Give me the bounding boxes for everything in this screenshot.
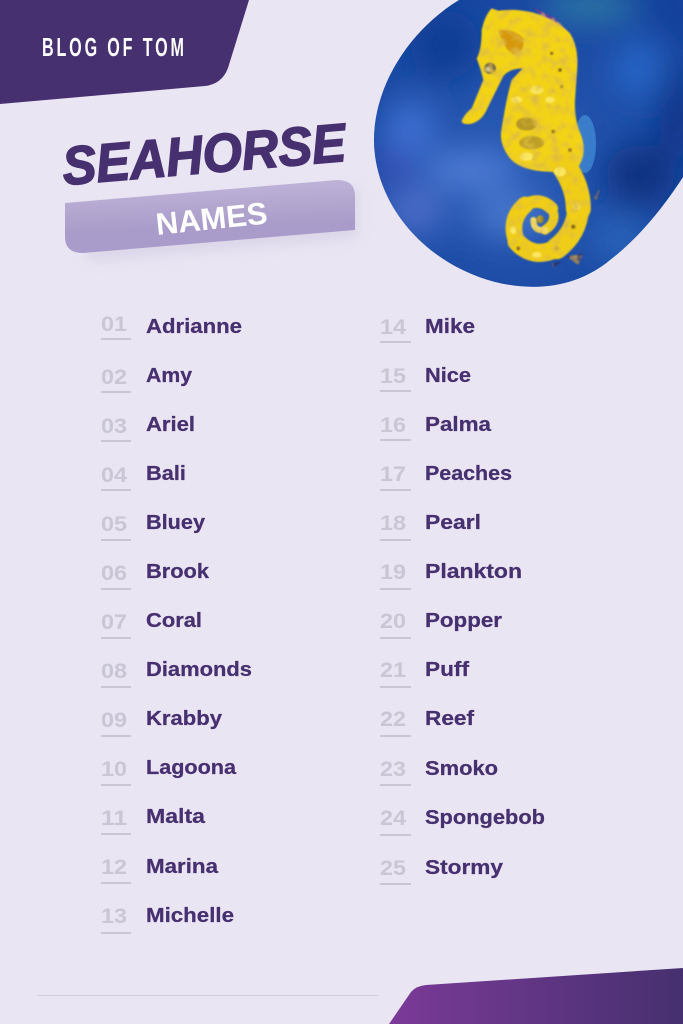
name 07	[101, 609, 202, 638]
name 19	[380, 560, 522, 589]
footer rule	[37, 994, 378, 996]
photo: yellow seahorse on blue water	[370, 0, 683, 295]
name 20	[380, 609, 502, 638]
name 25: 25	[380, 856, 406, 880]
name 18: 18	[380, 511, 406, 535]
name 13: 13	[101, 904, 127, 928]
subtitle banner	[65, 180, 358, 262]
name 12	[101, 855, 219, 883]
name 15	[380, 364, 471, 391]
name 25	[380, 856, 504, 884]
name 25: Stormy	[425, 856, 504, 879]
footer banner	[389, 968, 683, 1024]
name 08: Diamonds	[146, 658, 252, 681]
name 09: 09	[101, 708, 127, 732]
name 11: Malta	[146, 805, 206, 828]
name 11	[101, 805, 206, 834]
name 09	[101, 707, 223, 736]
name 13: Michelle	[146, 904, 234, 927]
right column list	[380, 315, 545, 884]
title: seahorse: SEAHORSE	[60, 113, 350, 197]
name 21: Puff	[425, 658, 469, 681]
left column list	[101, 312, 252, 933]
name 03: 03	[101, 414, 127, 438]
name 23: 23	[380, 757, 406, 781]
name 03: Ariel	[146, 413, 195, 436]
name 19: 19	[380, 560, 406, 584]
name 12: 12	[101, 855, 127, 879]
name 03	[101, 413, 195, 441]
name 01: 01	[101, 312, 127, 336]
name 19: Plankton	[425, 560, 522, 583]
name 16: Palma	[425, 413, 492, 436]
name 18	[380, 511, 481, 540]
name 01: Adrianne	[146, 315, 242, 338]
name 17	[380, 462, 512, 490]
brand name: BLOG OF TOM	[42, 32, 187, 62]
name 23: Smoko	[425, 757, 498, 780]
name 20: 20	[380, 609, 406, 633]
header banner	[0, 0, 249, 104]
name 06	[101, 560, 210, 589]
name 09: Krabby	[146, 707, 223, 730]
name 12: Marina	[146, 855, 219, 878]
name 07: Coral	[146, 609, 202, 632]
name 17: Peaches	[425, 462, 512, 485]
name 15: 15	[380, 364, 406, 388]
name 02	[101, 364, 193, 392]
name 22: Reef	[425, 707, 474, 730]
name 06: 06	[101, 561, 127, 585]
name 13	[101, 904, 234, 933]
name 11: 11	[101, 806, 127, 830]
name 22: 22	[380, 707, 406, 731]
name 23	[380, 757, 498, 785]
fin	[577, 115, 596, 173]
name 22	[380, 707, 474, 736]
name 16: 16	[380, 413, 406, 437]
name 04: 04	[101, 463, 127, 487]
name 06: Brook	[146, 560, 210, 583]
name 05: Bluey	[146, 511, 206, 534]
name 08	[101, 658, 252, 687]
name 16	[380, 413, 492, 440]
name 10: 10	[101, 757, 127, 781]
name 21: 21	[380, 658, 406, 682]
name 15: Nice	[425, 364, 471, 387]
name 05	[101, 511, 206, 540]
name 24: Spongebob	[425, 806, 545, 829]
name 20: Popper	[425, 609, 502, 632]
name 04: Bali	[146, 462, 186, 485]
name 24: 24	[380, 806, 406, 830]
name 05: 05	[101, 512, 127, 536]
name 04	[101, 462, 186, 490]
name 17: 17	[380, 462, 406, 486]
name 08: 08	[101, 659, 127, 683]
name 07: 07	[101, 610, 127, 634]
name 10: Lagoona	[146, 756, 237, 779]
name 18: Pearl	[425, 511, 481, 534]
name 02: 02	[101, 365, 127, 389]
subtitle text: NAMES	[154, 195, 269, 242]
seahorse	[462, 7, 601, 267]
name 14: Mike	[425, 315, 475, 338]
name 02: Amy	[146, 364, 193, 387]
name 21	[380, 658, 469, 687]
name 01	[101, 312, 242, 339]
name 10	[101, 756, 237, 785]
name 14	[380, 315, 475, 342]
name 24	[380, 806, 545, 835]
name 14: 14	[380, 315, 406, 339]
